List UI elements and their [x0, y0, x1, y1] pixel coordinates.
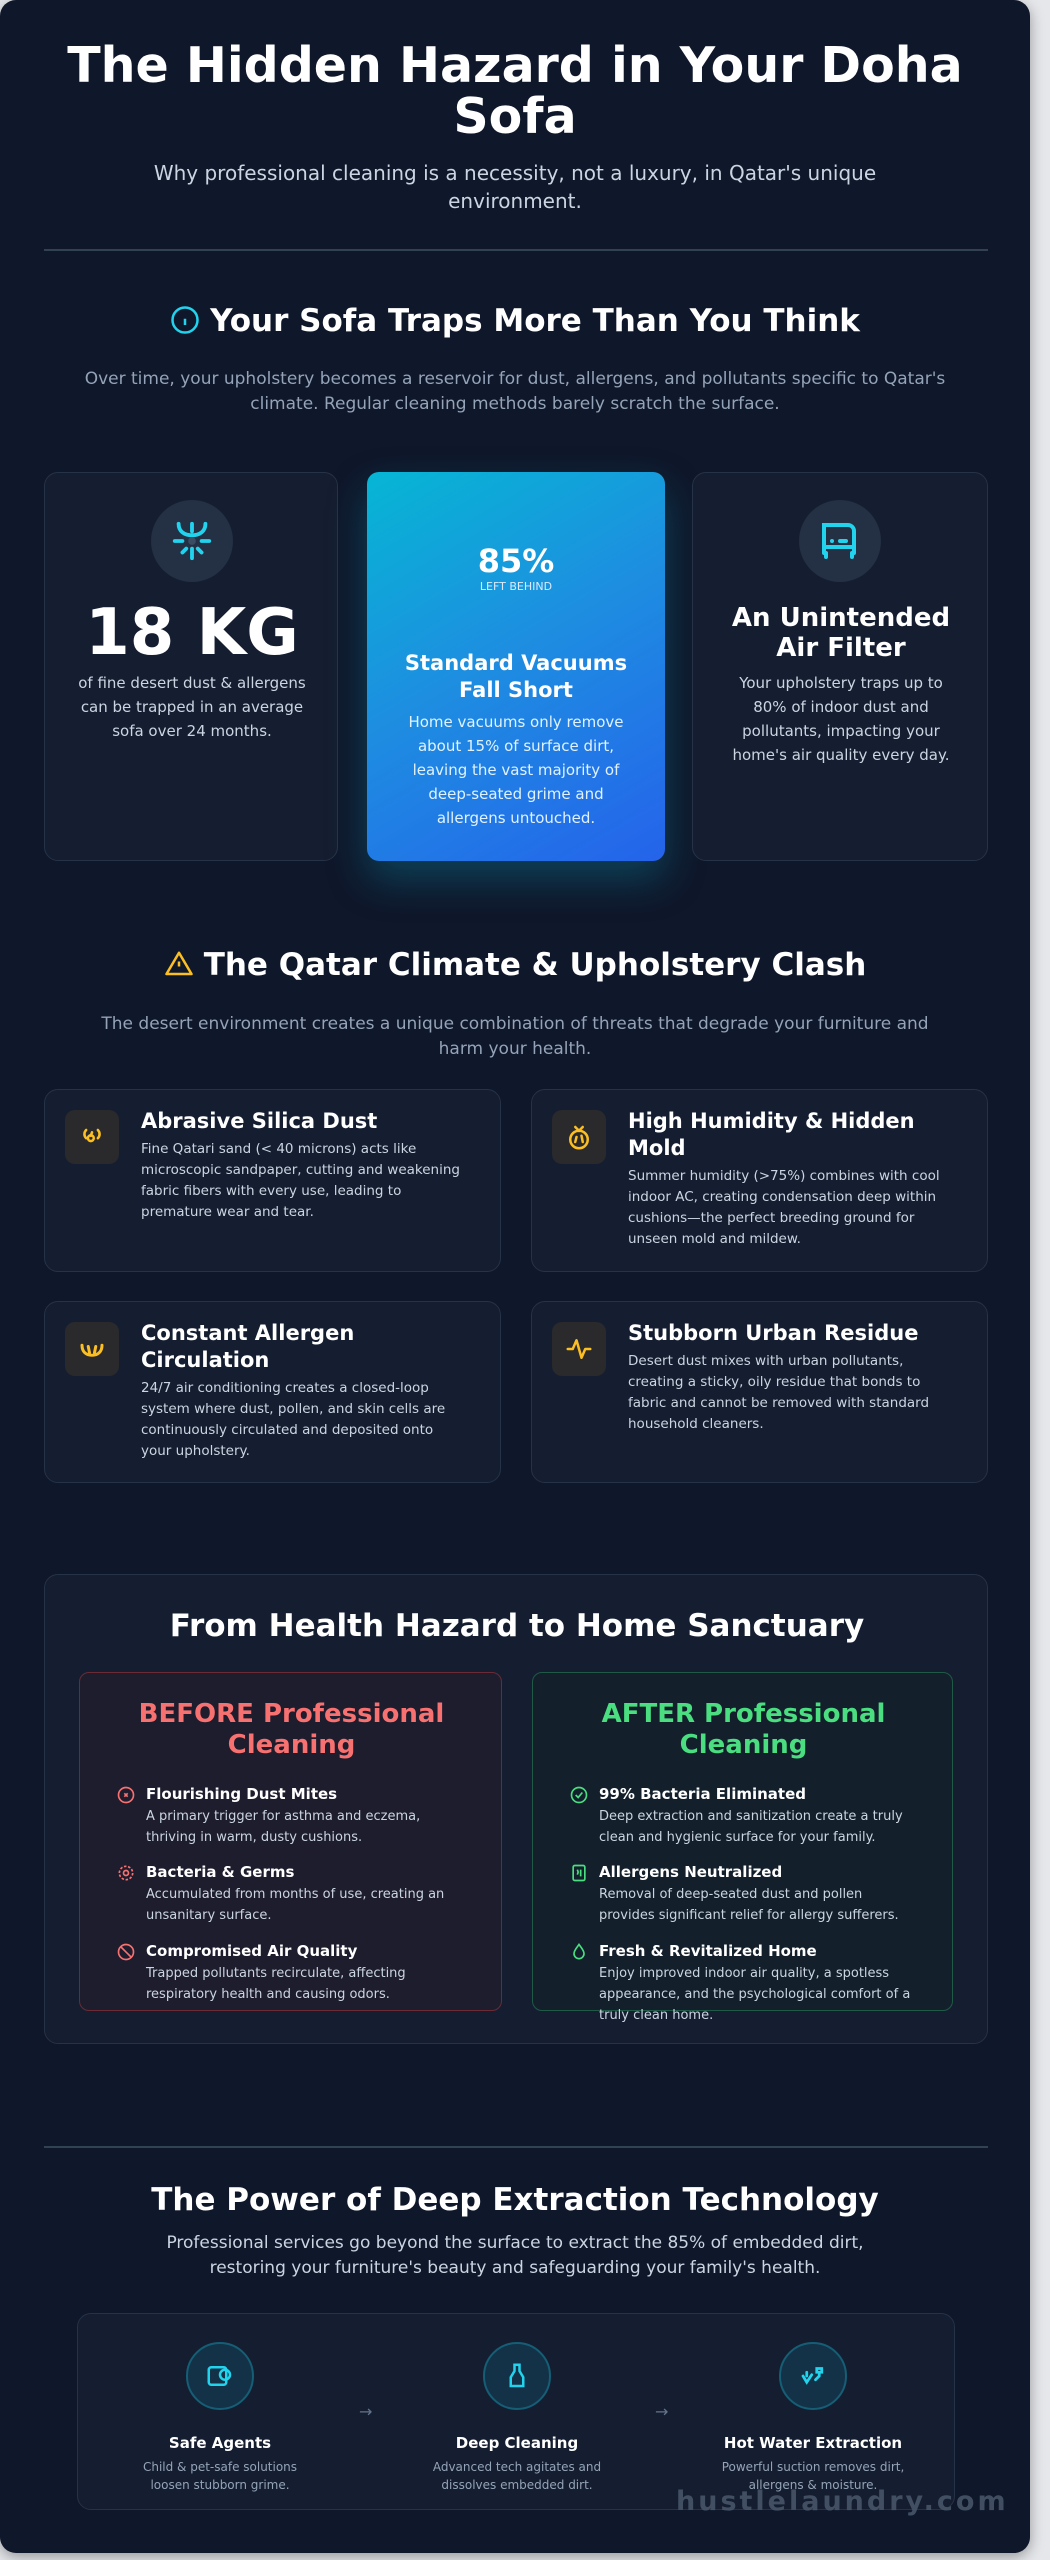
item: bacteria eliminated: 99% Bacteria Eliminated [599, 1785, 806, 1803]
stat card: air filter [692, 472, 988, 861]
text [628, 1109, 940, 1247]
text: Fine Qatari sand (< 40 microns) acts like microscopic sandpaper, cutting and weakening fabric fibers with every use, leading to premature wear and tear. [141, 1141, 460, 1220]
icon [65, 1322, 119, 1376]
step: safe agents [143, 2342, 297, 2492]
intro paragraph: Over time, your upholstery becomes a reservoir for dust, allergens, and pollutants specific to Qatar's climate. Regular cleaning methods barely scratch the surface. [85, 369, 945, 414]
item: fresh home: Enjoy improved indoor air quality, a spotless appearance, and the psychological comfort of a truly clean home. [599, 1966, 910, 2023]
panel: process steps [77, 2313, 955, 2510]
panel: process steps: Powerful suction removes dirt, allergens & moisture. [722, 2460, 904, 2492]
title: The Hidden Hazard in Your Doha Sofa [67, 37, 963, 145]
card heading [405, 651, 627, 702]
item: bacteria eliminated: Deep extraction and sanitization create a truly clean and hygienic surface for your family. [599, 1809, 903, 1845]
heading after: Cleaning [680, 1730, 807, 1760]
panel: process steps: Advanced tech agitates and dissolves embedded dirt. [433, 2460, 601, 2492]
text: Stubborn Urban Residue [628, 1321, 918, 1345]
panel: process steps: Safe Agents [169, 2434, 271, 2452]
icon [186, 2342, 254, 2410]
text: Abrasive Silica Dust [141, 1109, 377, 1133]
item: dust mites: Flourishing Dust Mites [146, 1785, 337, 1803]
extraction paragraph [166, 2233, 864, 2278]
stat 18 KG: 18 KG [85, 596, 299, 670]
text: Desert dust mixes with urban pollutants, creating a sticky, oily residue that bonds to fabric and cannot be removed with standard household cleaners. [628, 1353, 929, 1432]
panel: before/after [44, 1574, 988, 2044]
text: Summer humidity (>75%) combines with cool indoor AC, creating condensation deep within cushions—the perfect breeding ground for unseen mold and mildew. [628, 1168, 940, 1247]
stat text: of fine desert dust & allergens can be trapped in an average sofa over 24 months. [78, 674, 306, 740]
item: bacteria: Accumulated from months of use, creating an unsanitary surface. [146, 1887, 444, 1923]
stat card: standard vacuums (highlight) [367, 472, 665, 861]
arrow: → [655, 2402, 668, 2421]
heading before: BEFORE Professional [139, 1699, 444, 1729]
icon [779, 2342, 847, 2410]
item: air quality [118, 1942, 406, 2002]
icon: dust burst [151, 500, 233, 582]
card heading: Standard Vacuums [405, 651, 627, 675]
icon: warning [165, 952, 193, 976]
heading: sofa traps: Your Sofa Traps More Than You Think [210, 303, 860, 339]
heading: climate clash: The Qatar Climate & Upholstery Clash [204, 947, 866, 983]
item: dust mites: A primary trigger for asthma and eczema, thriving in warm, dusty cushions. [146, 1809, 420, 1845]
card heading [732, 603, 950, 663]
arrow: → [359, 2402, 372, 2421]
card: urban residue [531, 1301, 988, 1483]
card: allergen circulation [44, 1301, 501, 1483]
heading after: AFTER Professional [602, 1699, 885, 1729]
item: bacteria [118, 1863, 444, 1923]
label left behind: LEFT BEHIND [480, 580, 552, 593]
panel: process steps: Deep Cleaning [456, 2434, 578, 2452]
panel: process steps: Child & pet-safe solutions loosen stubborn grime. [143, 2460, 297, 2492]
subtitle: Why professional cleaning is a necessity, not a luxury, in Qatar's unique environment. [154, 161, 876, 213]
climate paragraph: The desert environment creates a unique combination of threats that degrade your furniture and harm your health. [101, 1014, 929, 1059]
item: bacteria: Bacteria & Germs [146, 1863, 294, 1881]
panel: after [532, 1672, 953, 2011]
extraction paragraph: Professional services go beyond the surface to extract the 85% of embedded dirt, [166, 2233, 864, 2253]
card: humidity [531, 1089, 988, 1272]
card heading: An Unintended [732, 603, 950, 633]
item: bacteria eliminated [570, 1785, 903, 1845]
item: fresh home [573, 1942, 910, 2023]
item: air quality: Trapped pollutants recirculate, affecting respiratory health and causing odors. [146, 1966, 406, 2002]
icon [483, 2342, 551, 2410]
icon: sofa [799, 500, 881, 582]
card body: Your upholstery traps up to 80% of indoor dust and pollutants, impacting your home's air quality every day. [732, 674, 949, 764]
item: allergens: Allergens Neutralized [599, 1863, 782, 1881]
text: Constant Allergen Circulation [141, 1321, 354, 1372]
icon [552, 1110, 606, 1164]
item: dust mites [118, 1785, 420, 1845]
stat card: 18 KG [44, 472, 338, 861]
heading: From Health Hazard to Home Sanctuary [170, 1608, 864, 1644]
icon [552, 1322, 606, 1376]
panel: before [79, 1672, 502, 2011]
heading: deep extraction: The Power of Deep Extraction Technology [151, 2182, 879, 2218]
heading before [139, 1699, 444, 1760]
extraction paragraph: restoring your furniture's beauty and safeguarding your family's health. [210, 2258, 820, 2278]
card heading: Air Filter [776, 633, 906, 663]
step: hot water extraction [722, 2342, 904, 2492]
text [141, 1321, 445, 1459]
item: allergens: Removal of deep-seated dust and pollen provides significant relief for allergy sufferers. [599, 1887, 899, 1923]
watermark: hustlelaundry.com [676, 2486, 1009, 2517]
heading before: Cleaning [228, 1730, 355, 1760]
item: allergens [572, 1863, 899, 1923]
item: air quality: Compromised Air Quality [146, 1942, 357, 1960]
heading after [602, 1699, 885, 1760]
stat 85%: 85% [478, 542, 554, 580]
card body: Home vacuums only remove about 15% of surface dirt, leaving the vast majority of deep-seated grime and allergens untouched. [408, 713, 624, 827]
panel: process steps: Hot Water Extraction [724, 2434, 902, 2452]
card heading: Fall Short [459, 678, 573, 702]
icon: info [171, 306, 199, 334]
text: 24/7 air conditioning creates a closed-loop system where dust, pollen, and skin cells are continuously circulated and deposited onto your upholstery. [141, 1380, 445, 1459]
icon [65, 1110, 119, 1164]
card: silica dust [44, 1089, 501, 1272]
item: fresh home: Fresh & Revitalized Home [599, 1942, 817, 1960]
step: deep cleaning [433, 2342, 601, 2492]
text: High Humidity & Hidden Mold [628, 1109, 915, 1160]
